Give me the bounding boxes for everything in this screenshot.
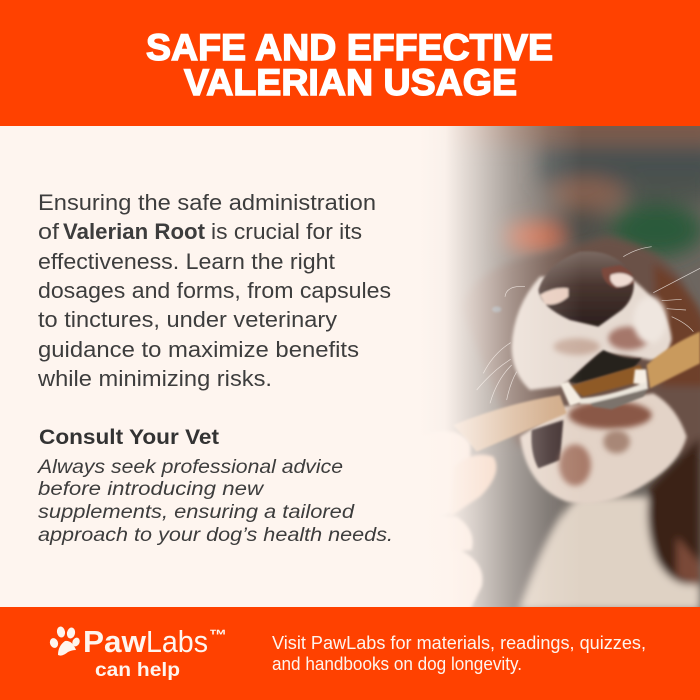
intro paragraph: is crucial for its xyxy=(211,219,362,244)
footer message: and handbooks on dog longevity. xyxy=(272,654,522,674)
nose xyxy=(538,251,634,327)
logo wordmark: ™ xyxy=(209,627,227,644)
italic advice text: approach to your dog’s health needs. xyxy=(38,524,393,546)
logo wordmark: Labs xyxy=(146,624,208,659)
intro paragraph: dosages and forms, from capsules xyxy=(38,278,391,303)
photo: dog chewing a treat stick xyxy=(448,126,700,607)
icon: paw logo xyxy=(49,626,81,656)
intro paragraph: effectiveness. Learn the right xyxy=(38,249,335,274)
intro paragraph: while minimizing risks. xyxy=(37,366,272,391)
mouth interior xyxy=(568,350,642,383)
title: SAFE AND EFFECTIVE xyxy=(146,27,553,68)
footer message: Visit PawLabs for materials, readings, quizzes, xyxy=(272,633,646,653)
italic advice text: supplements, ensuring a tailored xyxy=(38,501,355,523)
teeth xyxy=(560,369,648,409)
upper muzzle xyxy=(512,277,672,390)
italic advice text: Always seek professional advice xyxy=(37,456,343,478)
intro paragraph: Ensuring the safe administration xyxy=(38,190,376,215)
intro paragraph: guidance to maximize benefits xyxy=(38,337,359,362)
header banner xyxy=(0,0,700,126)
lower jaw xyxy=(520,393,687,504)
intro paragraph xyxy=(37,190,391,391)
italic advice text xyxy=(37,456,393,546)
subheading: consult your vet: Consult Your Vet xyxy=(39,426,219,449)
logo wordmark xyxy=(83,624,227,681)
hand xyxy=(448,432,498,607)
whiskers xyxy=(477,247,700,403)
title xyxy=(146,27,553,103)
title: VALERIAN USAGE xyxy=(184,62,517,103)
logo wordmark: can help xyxy=(95,660,180,681)
logo wordmark: Paw xyxy=(83,624,147,659)
intro paragraph: of xyxy=(38,219,60,244)
italic advice text: before introducing new xyxy=(38,478,265,500)
footer message xyxy=(272,633,646,674)
footer banner xyxy=(0,607,700,700)
intro paragraph: Valerian Root xyxy=(63,219,206,244)
treat stick xyxy=(453,332,700,452)
intro paragraph: to tinctures, under veterinary xyxy=(38,307,337,332)
